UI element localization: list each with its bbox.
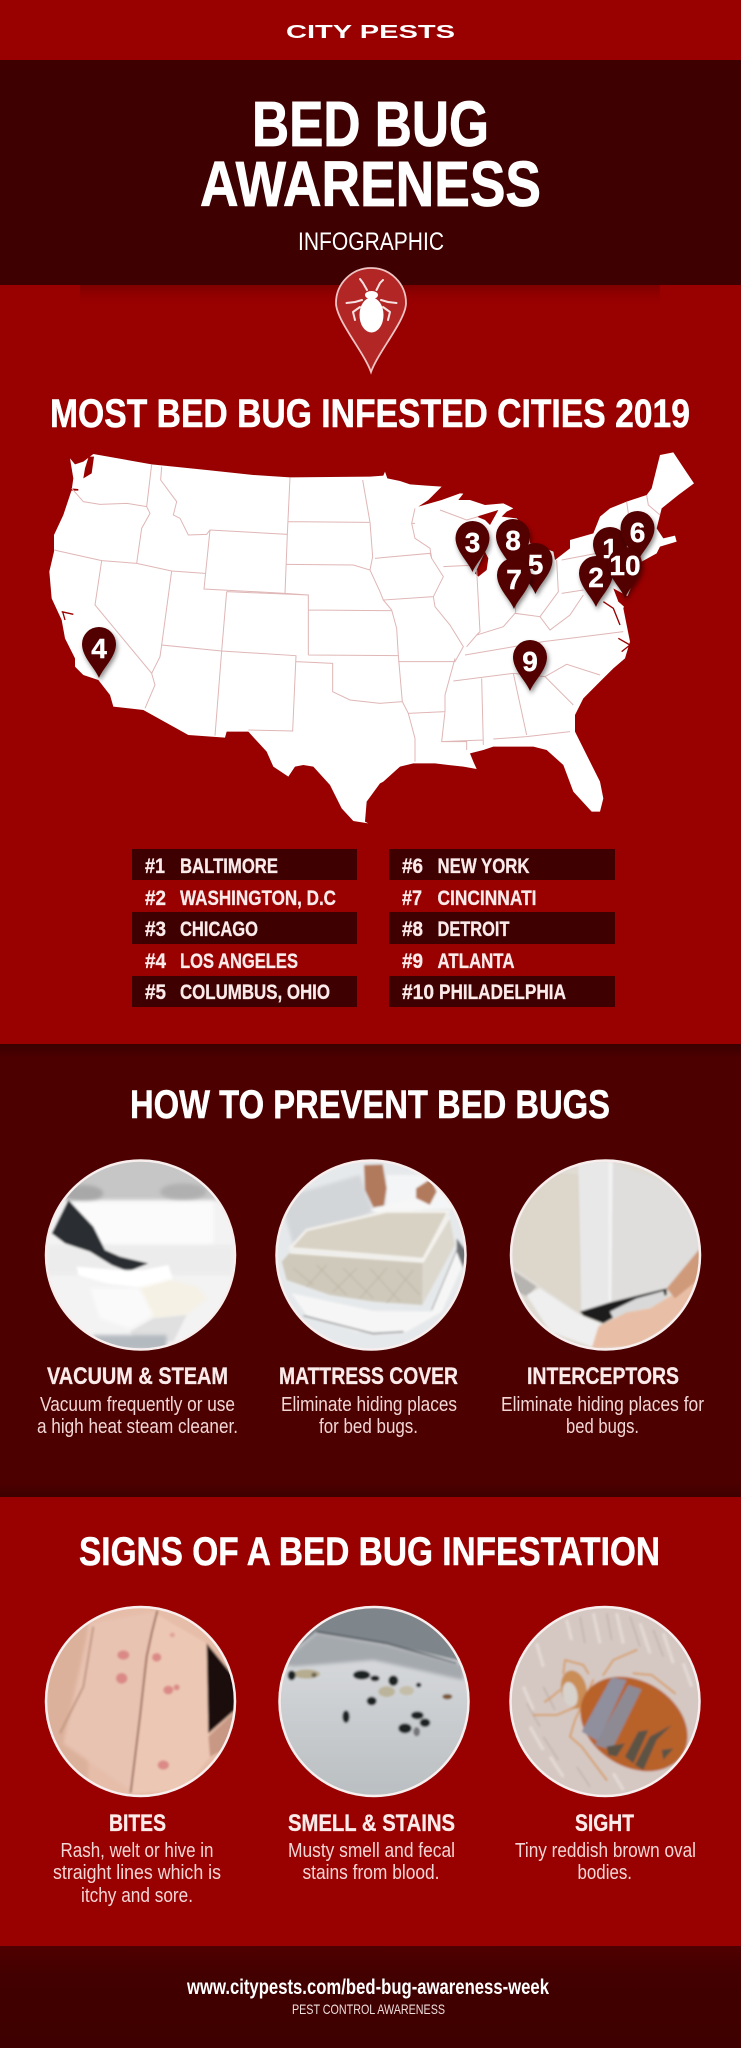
heading: prevention: HOW TO PREVENT BED BUGS	[130, 1083, 610, 1127]
title: AWARENESS	[200, 148, 541, 220]
card text: sight: Tiny reddish brown oval	[515, 1840, 696, 1862]
card text: smell and stains	[288, 1810, 455, 1884]
panel: ranked city list: #8	[402, 918, 423, 941]
panel: footer	[0, 1946, 741, 2048]
card text: bites: Rash, welt or hive in	[60, 1840, 214, 1862]
pin: Detroit: 8	[505, 525, 521, 556]
panel: ranked city list: #3	[145, 918, 166, 941]
card text: bites: straight lines which is	[53, 1862, 221, 1884]
photo: vacuum and steam	[40, 1155, 240, 1355]
title	[200, 88, 541, 220]
card text: interceptors: INTERCEPTORS	[527, 1363, 679, 1390]
card text: smell and stains: stains from blood.	[302, 1862, 440, 1884]
pin: Cincinnati	[497, 558, 531, 609]
pin: Baltimore: 1	[602, 533, 618, 564]
panel: ranked city list: #6	[402, 855, 423, 878]
card text: mattress cover	[279, 1363, 458, 1438]
pin: Philadelphia	[608, 547, 642, 598]
panel: ranked city list	[132, 849, 615, 1007]
subtitle: INFOGRAPHIC	[298, 228, 444, 256]
pin: Detroit	[496, 519, 530, 570]
card text: bites: itchy and sore.	[81, 1885, 193, 1907]
panel: ranked city list: #2	[145, 887, 166, 910]
panel: ranked city list: CINCINNATI	[438, 887, 536, 910]
card text: smell and stains: SMELL & STAINS	[288, 1810, 455, 1837]
card text: sight	[515, 1810, 696, 1884]
card text: sight: bodies.	[578, 1862, 632, 1884]
pin: New York: 6	[630, 517, 645, 548]
panel: ranked city list: #9	[402, 950, 423, 973]
card text: vacuum and steam: a high heat steam cleaner.	[37, 1416, 238, 1438]
card text: vacuum and steam	[37, 1363, 238, 1438]
pin: Philadelphia: 10	[609, 550, 641, 581]
pin: Baltimore	[593, 527, 627, 578]
panel: ranked city list: BALTIMORE	[180, 855, 278, 878]
footer link: www.citypests.com/bed-bug-awareness-week	[186, 1976, 549, 1999]
panel: how to prevent bed bugs	[0, 1044, 741, 1497]
panel: ranked city list: WASHINGTON, D.C	[180, 887, 336, 910]
pin: Washington	[579, 556, 613, 607]
card text: mattress cover: Eliminate hiding places	[281, 1394, 457, 1416]
photo: bites	[44, 1606, 236, 1798]
pin: New York	[620, 511, 654, 562]
footer tagline: PEST CONTROL AWARENESS	[292, 2001, 445, 2017]
card text: smell and stains: Musty smell and fecal	[288, 1840, 455, 1862]
panel: ranked city list: DETROIT	[438, 918, 510, 941]
panel: ranked city list: #5	[145, 981, 166, 1004]
card text: vacuum and steam: VACUUM & STEAM	[47, 1363, 228, 1390]
pin: Washington: 2	[588, 562, 604, 593]
map: contiguous United States	[49, 452, 694, 823]
icon: bed bug location pin	[336, 268, 406, 372]
panel: ranked city list: NEW YORK	[438, 855, 530, 878]
logo: City Pests: CITY PESTS	[286, 22, 455, 42]
pin: Columbus	[518, 543, 552, 594]
band shadow	[80, 285, 660, 307]
pin: Atlanta: 9	[522, 646, 538, 677]
panel: ranked city list: #7	[402, 887, 422, 910]
photo: mattress cover	[275, 1159, 467, 1351]
pin: Los Angeles	[82, 627, 116, 678]
pin: Cincinnati: 7	[506, 564, 522, 595]
card text: mattress cover: for bed bugs.	[319, 1416, 418, 1438]
card text: sight: SIGHT	[575, 1810, 634, 1837]
panel: ranked city list: #10	[402, 981, 434, 1004]
card text: interceptors: Eliminate hiding places for	[501, 1394, 704, 1416]
panel: ranked city list: #4	[145, 950, 166, 973]
panel: ranked city list: COLUMBUS, OHIO	[180, 981, 330, 1004]
panel: ranked city list: #1	[145, 855, 165, 878]
card text: bites	[53, 1810, 221, 1907]
photo: smell and stains	[278, 1606, 470, 1798]
panel: ranked city list: LOS ANGELES	[180, 950, 298, 973]
panel: ranked city list: CHICAGO	[180, 918, 258, 941]
pin: Atlanta	[513, 640, 547, 691]
state borders	[54, 464, 660, 762]
card text: vacuum and steam: Vacuum frequently or use	[40, 1394, 235, 1416]
card text: mattress cover: MATTRESS COVER	[279, 1363, 458, 1390]
pin: Los Angeles: 4	[91, 633, 107, 664]
photo: interceptors	[510, 1159, 702, 1351]
card text: bites: BITES	[109, 1810, 166, 1837]
chart: US map with ranked city pins	[49, 452, 694, 823]
panel: title band	[0, 60, 741, 285]
panel: ranked city list: ATLANTA	[438, 950, 514, 973]
card text: interceptors	[501, 1363, 704, 1438]
panel: ranked city list: PHILADELPHIA	[439, 981, 566, 1004]
pin: Columbus: 5	[528, 549, 543, 580]
title: BED BUG	[252, 88, 489, 160]
pin: Chicago	[456, 521, 490, 572]
pin: Chicago: 3	[465, 527, 480, 558]
card text: interceptors: bed bugs.	[566, 1416, 639, 1438]
photo: bed bug sighting	[509, 1606, 701, 1798]
